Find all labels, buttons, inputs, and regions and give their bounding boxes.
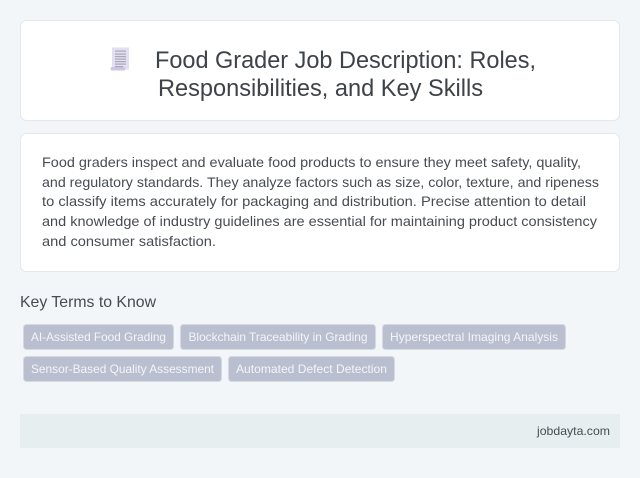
title: Food Grader Job Description: Roles, (155, 47, 536, 74)
text block: description: and consumer satisfaction. (42, 233, 216, 249)
title: Responsibilities, and Key Skills (158, 75, 483, 102)
tag: Automated Defect Detection: Automated Defect Detection (236, 362, 387, 376)
tag: Hyperspectral Imaging Analysis: Hyperspectral Imaging Analysis (390, 330, 558, 344)
text block: description: and regulatory standards. They analyze factors such as size, color, texture, and ripeness (42, 174, 599, 190)
tag: Sensor-Based Quality Assessment: Sensor-Based Quality Assessment (31, 362, 215, 376)
tag: AI-Assisted Food Grading: AI-Assisted Food Grading (31, 330, 166, 344)
icon: document scroll (110, 48, 129, 70)
heading: key terms: Key Terms to Know (20, 294, 156, 311)
tag: Automated Defect Detection (228, 356, 394, 382)
tag: Blockchain Traceability in Grading (180, 324, 376, 350)
text block: description: Food graders inspect and evaluate food products to ensure they meet safety, quality, (42, 154, 581, 170)
tags: key terms (24, 324, 566, 382)
text block: description: and knowledge of industry guidelines are essential for maintaining product consistency (42, 213, 597, 229)
footer: site name: jobdayta.com (536, 424, 610, 438)
tag: Sensor-Based Quality Assessment (24, 356, 222, 382)
panel: title card (20, 20, 620, 120)
tag: Blockchain Traceability in Grading: Blockchain Traceability in Grading (188, 330, 368, 344)
panel: description (20, 134, 620, 272)
tag: AI-Assisted Food Grading (24, 324, 174, 350)
footer (20, 414, 620, 448)
text block: description: to classify items accurately for packaging and distribution. Precise attention to detail (42, 193, 586, 209)
tag: Hyperspectral Imaging Analysis (382, 324, 566, 350)
